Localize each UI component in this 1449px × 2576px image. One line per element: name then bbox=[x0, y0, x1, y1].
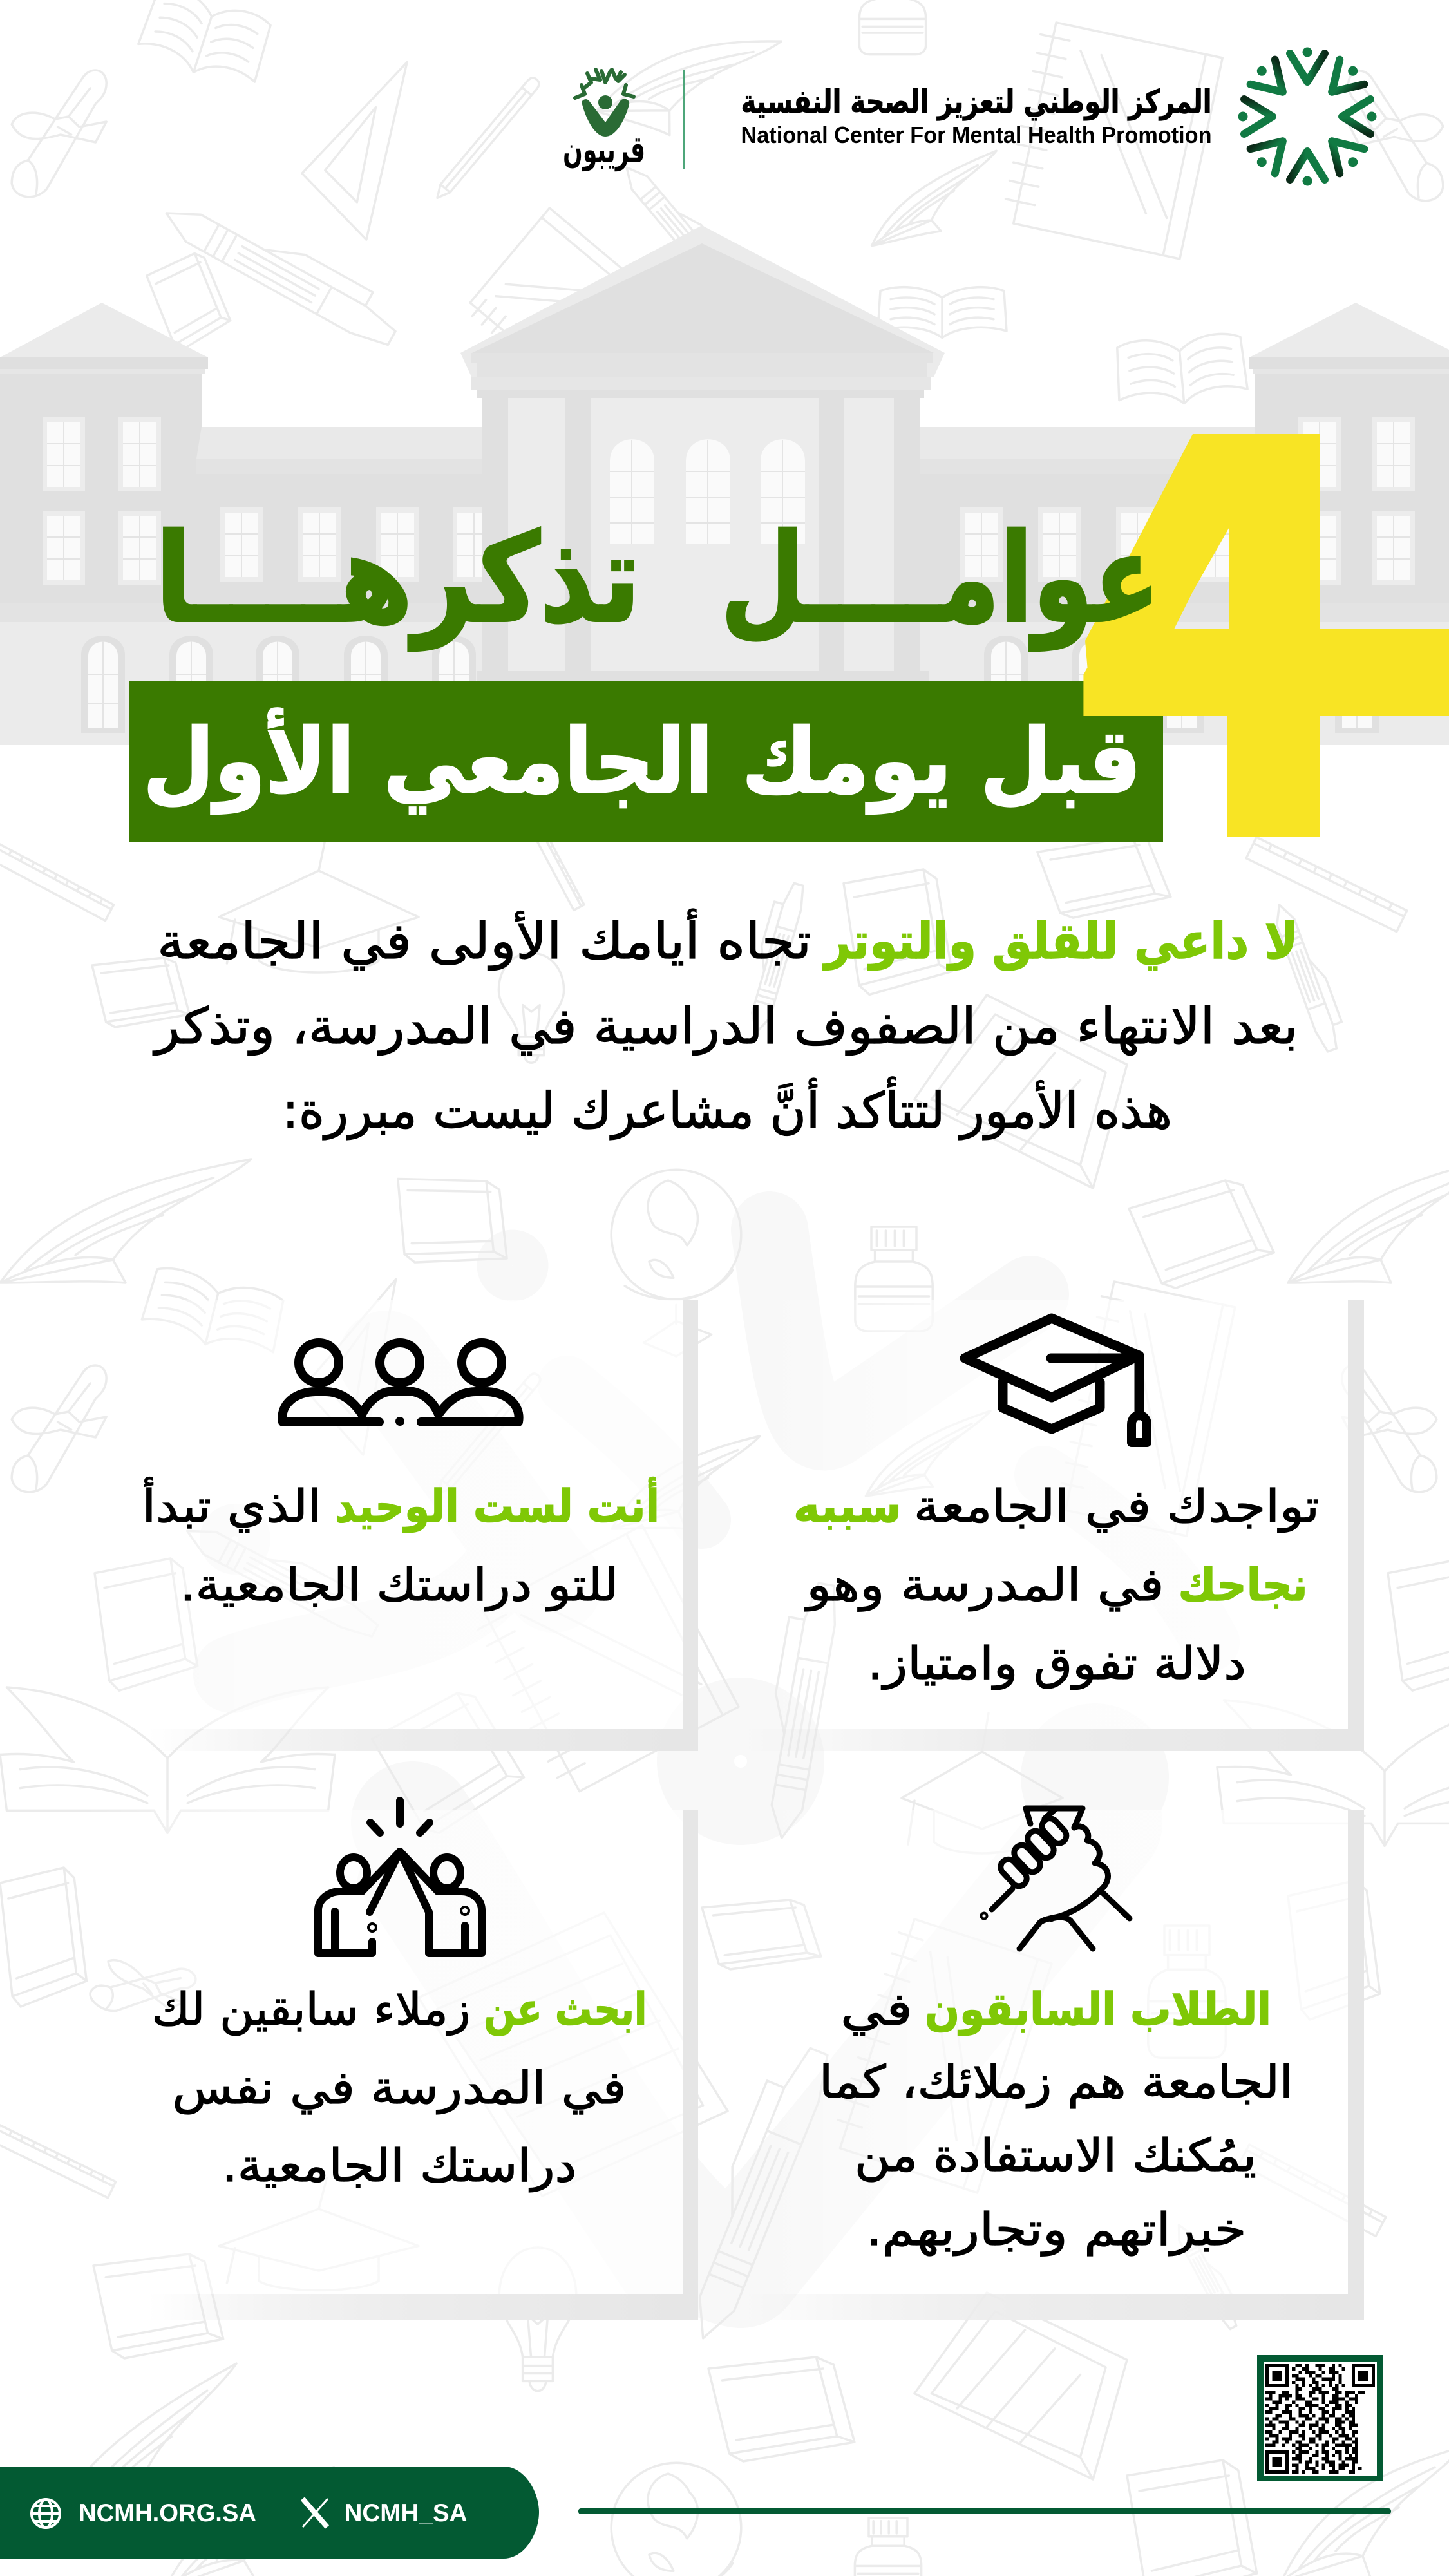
text: card four: الطلاب السابقون bbox=[925, 1983, 1271, 2036]
big number 4: 4 bbox=[1063, 325, 1386, 969]
icon: graduation cap bbox=[965, 1318, 1147, 1443]
header divider bbox=[683, 70, 685, 169]
logo: NCMH star mark bbox=[1238, 48, 1377, 185]
intro paragraph: تجاه أيامك الأولى في الجامعة bbox=[157, 909, 811, 971]
central portico bbox=[460, 225, 945, 683]
text: card four: في bbox=[840, 1983, 913, 2036]
text: card one: سببه bbox=[793, 1480, 902, 1533]
footer rule bbox=[578, 2508, 1391, 2514]
text: card four bbox=[819, 1983, 1293, 2257]
title banner background bbox=[129, 681, 1163, 842]
text: card two: أنت لست الوحيد bbox=[335, 1477, 659, 1533]
text: card four: خبراتهم وتجاربهم. bbox=[866, 2203, 1247, 2257]
icon: high five bbox=[318, 1801, 482, 1953]
text: card two: للتو دراستك الجامعية. bbox=[180, 1558, 618, 1611]
illustration: university building bbox=[0, 225, 1449, 745]
text: card three bbox=[152, 1983, 647, 2192]
text: card two bbox=[142, 1477, 659, 1611]
right tower bbox=[1249, 303, 1449, 606]
info panel: bottom left frame bbox=[84, 1810, 698, 2320]
logo: Qaribon mark bbox=[575, 70, 634, 137]
logo text: organisation name Arabic: المركز الوطني لتعزيز الصحة النفسية bbox=[741, 83, 1212, 121]
background: faint logo shapes bbox=[216, 1230, 1211, 2280]
text: card three: دراستك الجامعية. bbox=[222, 2139, 577, 2192]
QR code bbox=[1257, 2355, 1383, 2481]
big number 4 bbox=[1083, 434, 1449, 837]
info panel: top left frame bbox=[84, 1300, 698, 1751]
text: card one: في المدرسة وهو bbox=[804, 1558, 1164, 1612]
website text: NCMH.ORG.SA bbox=[79, 2499, 256, 2527]
logo text: organisation name English: National Center For Mental Health Promotion bbox=[741, 122, 1212, 148]
text: card one: دلالة تفوق وامتياز. bbox=[867, 1637, 1246, 1690]
lower storey bbox=[0, 603, 1449, 745]
text: card four: يمُكنك الاستفادة من bbox=[855, 2129, 1256, 2182]
text: card one: تواجدك في الجامعة bbox=[914, 1480, 1320, 1533]
text: card one bbox=[793, 1480, 1320, 1690]
title line 2: قبل يومك الجامعي الأول bbox=[143, 708, 1141, 814]
text: card three: في المدرسة في نفس bbox=[173, 2061, 626, 2115]
footer contact bar bbox=[0, 2467, 539, 2559]
text: card four: الجامعة هم زملائك، كما bbox=[819, 2056, 1293, 2108]
intro paragraph: لا داعي للقلق والتوتر bbox=[822, 913, 1298, 971]
text: card three: ابحث عن bbox=[484, 1983, 647, 2036]
title line 1: word one: عوامــــل bbox=[721, 507, 1160, 651]
text: card three: زملاء سابقين لك bbox=[152, 1983, 470, 2036]
icon: X bbox=[303, 2499, 328, 2527]
info panel: top right frame bbox=[741, 1300, 1364, 1751]
icon: clasped hands bbox=[983, 1808, 1130, 1949]
logo text: Qaribon: قريبون bbox=[563, 128, 645, 172]
icon: globe bbox=[32, 2499, 60, 2528]
building wings bbox=[196, 427, 1255, 606]
left tower bbox=[0, 303, 208, 606]
social handle text: NCMH_SA bbox=[344, 2499, 468, 2527]
intro paragraph: بعد الانتهاء من الصفوف الدراسية في المدرسة، وتذكر bbox=[152, 998, 1298, 1056]
intro paragraph: هذه الأمور لتتأكد أنَّ مشاعرك ليست مبررة: bbox=[282, 1077, 1172, 1140]
icon: three people bbox=[282, 1343, 519, 1424]
title line 1: word two: تذكرهــــا bbox=[155, 507, 641, 651]
text: card two: الذي تبدأ bbox=[142, 1477, 322, 1533]
info panel: bottom right frame bbox=[741, 1810, 1364, 2320]
text: card one: نجاحك bbox=[1179, 1558, 1307, 1611]
intro paragraph bbox=[152, 909, 1298, 1140]
